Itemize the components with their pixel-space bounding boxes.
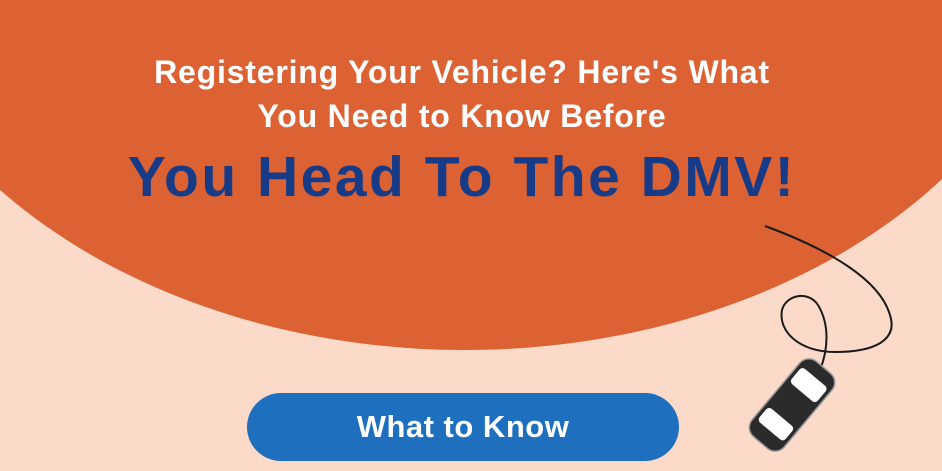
icon: car with looping path xyxy=(748,225,893,452)
button: What to Know xyxy=(247,393,679,461)
button: What to Know: What to Know xyxy=(357,409,569,444)
title: You Need to Know Before xyxy=(258,98,666,134)
title: Registering Your Vehicle? Here's What xyxy=(154,54,770,90)
headline: You Head To The DMV! xyxy=(128,145,796,209)
title xyxy=(154,54,770,134)
